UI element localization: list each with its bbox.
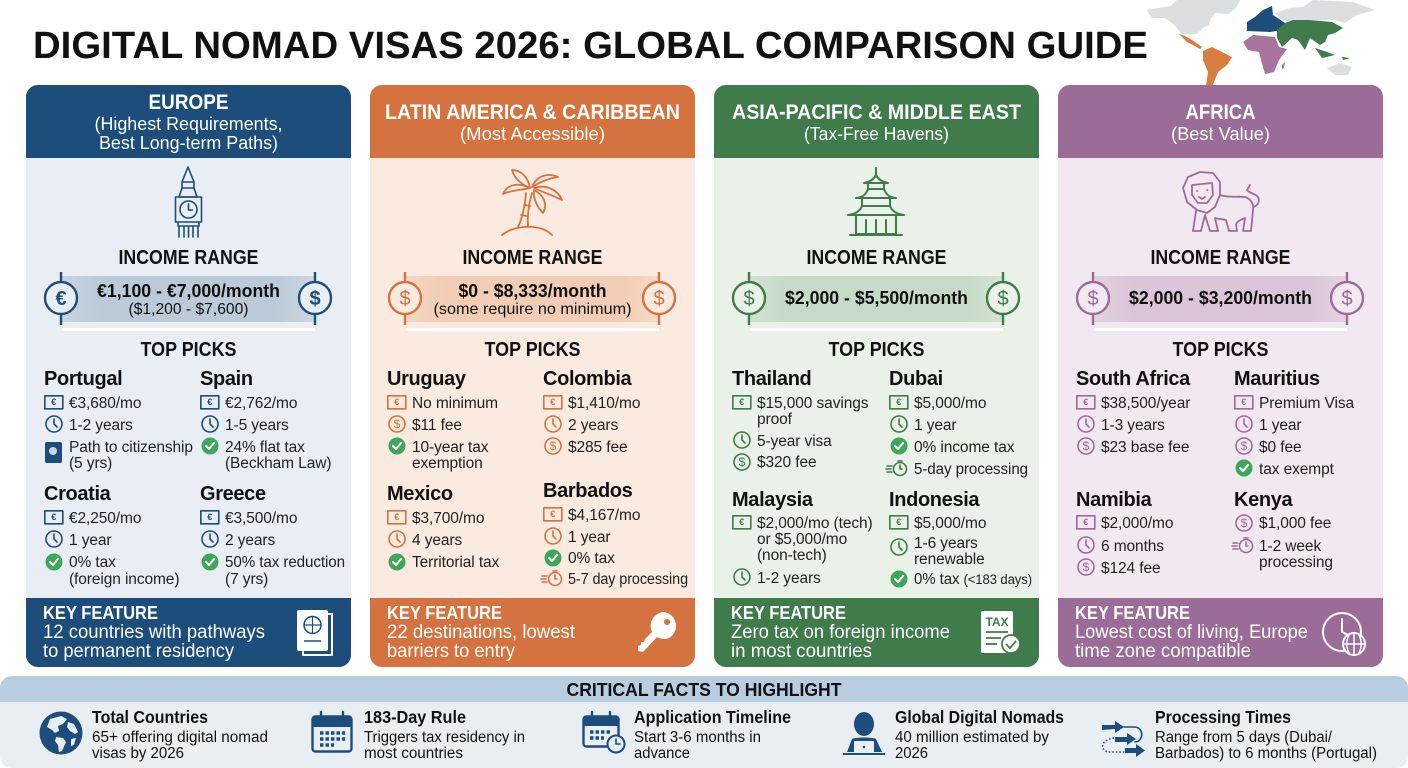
country: Barbados: 0% tax — [568, 550, 615, 567]
country: Indonesia: 0% tax (<183 days) — [914, 571, 1032, 588]
fact: 183-day rule: Triggers tax residency in — [364, 729, 525, 746]
country: Colombia: Colombia — [543, 368, 633, 390]
country: Malaysia: Malaysia — [732, 489, 814, 511]
heading: Europe: EUROPE — [148, 91, 228, 114]
country: Indonesia: € — [896, 517, 901, 527]
key feature: Europe: to permanent residency — [43, 641, 234, 662]
heading: Asia-Pacific — [732, 101, 1021, 144]
fact: processing times: Range from 5 days (Dubai/ — [1155, 729, 1333, 746]
fact: processing times: Processing Times — [1155, 707, 1291, 727]
income range band: (some require no minimum) — [434, 301, 632, 318]
fact: processing times: Barbados) to 6 months (Portugal) — [1155, 745, 1377, 762]
world map — [1147, 0, 1375, 87]
country: Croatia: Croatia — [44, 483, 112, 505]
country: Uruguay: No minimum — [412, 395, 498, 412]
key feature: Africa — [1058, 598, 1383, 667]
icon: dollar coin left: $ — [743, 288, 755, 310]
country: Portugal: (5 yrs) — [69, 455, 112, 472]
country: Dubai: 0% income tax — [914, 439, 1015, 456]
country: Spain: Spain — [200, 368, 253, 390]
heading: Europe: (Highest Requirements, — [94, 114, 282, 134]
country: Barbados — [541, 480, 688, 588]
country: Spain: (Beckham Law) — [225, 455, 331, 472]
country: Colombia: $1,410/mo — [568, 395, 640, 412]
top picks heading: TOP PICKS — [484, 339, 580, 361]
country: Namibia: $2,000/mo — [1101, 515, 1173, 532]
fact: global digital nomads: Global Digital Nomads — [895, 707, 1064, 727]
key feature: Europe: KEY FEATURE — [43, 603, 158, 623]
country: Thailand: $15,000 savings — [757, 395, 869, 412]
icon: dollar coin: $ — [309, 288, 321, 310]
fact: 183-day rule: most countries — [364, 745, 463, 762]
country: South Africa — [1076, 368, 1191, 456]
fact: total countries: 65+ offering digital nomad — [92, 729, 268, 746]
country: Colombia: € — [550, 397, 555, 407]
income range band: €1,100 - €7,000/month — [97, 281, 280, 301]
key feature: Asia-Pacific: Zero tax on foreign income — [731, 622, 950, 643]
icon: dollar coin left: $ — [1087, 288, 1099, 310]
top picks heading: TOP PICKS — [1172, 339, 1268, 361]
icon: euro coin — [45, 272, 77, 325]
country: Malaysia: or $5,000/mo — [757, 531, 847, 548]
country: Greece — [200, 483, 345, 588]
key feature: Asia-Pacific: KEY FEATURE — [731, 603, 846, 623]
country: Barbados: 5-7 day processing — [568, 571, 688, 588]
income range heading: INCOME RANGE — [462, 247, 602, 269]
income range band: $0 - $8,333/month — [458, 281, 606, 301]
country: Dubai: 5-day processing — [914, 461, 1028, 478]
country: Indonesia: Indonesia — [889, 489, 980, 511]
country: Mexico: $3,700/mo — [412, 510, 484, 527]
key feature: Latin America: barriers to entry — [387, 641, 515, 662]
country: Dubai: Dubai — [889, 368, 943, 390]
country: Namibia: 6 months — [1101, 538, 1164, 555]
country: Namibia: Namibia — [1076, 489, 1153, 511]
panel: Latin America and Caribbean — [370, 85, 695, 667]
country: Spain: €2,762/mo — [225, 395, 297, 412]
country: Croatia: 1 year — [69, 532, 111, 549]
country: Croatia: €2,250/mo — [69, 510, 141, 527]
key feature: Europe: 12 countries with pathways — [43, 622, 265, 643]
country: Croatia: 0% tax — [69, 554, 116, 571]
country: South Africa: $38,500/year — [1101, 395, 1190, 412]
top picks heading: TOP PICKS — [828, 339, 924, 361]
icon: dollar coin right — [643, 272, 675, 325]
country: Kenya: $1,000 fee — [1259, 515, 1331, 532]
country: Croatia: (foreign income) — [69, 571, 179, 588]
country: Uruguay — [387, 368, 498, 472]
key feature: Asia-Pacific: in most countries — [731, 641, 872, 662]
country: Portugal: Portugal — [44, 368, 122, 390]
country: Uruguay: € — [394, 397, 399, 407]
country: Kenya: processing — [1259, 554, 1333, 571]
heading: Africa: AFRICA — [1186, 101, 1256, 124]
fact: total countries: Total Countries — [92, 707, 208, 727]
heading: Africa: (Best Value) — [1171, 124, 1270, 144]
country: Mauritius: 1 year — [1259, 417, 1301, 434]
key feature: Africa: Lowest cost of living, Europe — [1075, 622, 1308, 643]
country: Kenya: $ — [1241, 516, 1248, 530]
country: Dubai — [886, 368, 1028, 478]
country: Malaysia: $2,000/mo (tech) — [757, 515, 873, 532]
country: Mexico: € — [394, 512, 399, 522]
country: Malaysia: € — [739, 517, 744, 527]
country: Mauritius: $0 fee — [1259, 439, 1302, 456]
country: Barbados: $4,167/mo — [568, 507, 640, 524]
country: South Africa: South Africa — [1076, 368, 1191, 390]
key feature: Latin America: 22 destinations, lowest — [387, 622, 576, 643]
icon: euro coin: € — [55, 288, 67, 310]
country: Indonesia: 1-6 years — [914, 535, 978, 552]
panel: Asia-Pacific and Middle East — [714, 85, 1039, 667]
country: Thailand: proof — [757, 411, 793, 428]
fact: total countries: visas by 2026 — [92, 745, 184, 762]
icon: dollar coin left — [733, 272, 765, 325]
heading: Latin America — [385, 101, 680, 144]
country: Thailand — [732, 368, 869, 471]
income range band — [750, 276, 1003, 331]
country: Barbados: € — [550, 509, 555, 519]
country: Kenya — [1232, 489, 1333, 571]
country: Barbados: 1 year — [568, 529, 610, 546]
country: Mauritius: Premium Visa — [1259, 395, 1354, 412]
panel: critical facts — [0, 676, 1408, 768]
fact: global digital nomads — [843, 707, 1064, 762]
heading: Latin America: LATIN AMERICA & CARIBBEAN — [385, 101, 680, 124]
country: Mauritius: € — [1241, 397, 1246, 407]
icon: dollar coin right: $ — [1341, 288, 1353, 310]
country: Indonesia: $5,000/mo — [914, 515, 986, 532]
title: DIGITAL NOMAD VISAS 2026: GLOBAL COMPARISON GUIDE — [33, 25, 1148, 67]
fact: application timeline: Start 3-6 months in — [634, 729, 761, 746]
icon: pagoda — [848, 168, 904, 235]
country: Colombia: $ — [550, 439, 557, 453]
country: Spain: 24% flat tax — [225, 439, 305, 456]
fact: application timeline: Application Timeline — [634, 707, 791, 727]
country: Dubai: 1 year — [914, 417, 956, 434]
country: Greece: Greece — [200, 483, 266, 505]
country: Mexico: 4 years — [412, 532, 462, 549]
icon: dollar coin right — [1331, 272, 1363, 325]
panel: Europe — [26, 85, 351, 667]
top picks heading: TOP PICKS — [140, 339, 236, 361]
country: Greece: €3,500/mo — [225, 510, 297, 527]
country: Indonesia: renewable — [914, 551, 985, 568]
country: Colombia — [543, 368, 640, 456]
country: Mauritius — [1234, 368, 1354, 478]
fact: application timeline: advance — [634, 745, 690, 762]
country: Portugal — [44, 368, 193, 472]
country: Croatia: € — [51, 512, 56, 522]
country: Indonesia — [889, 489, 1032, 588]
country: Spain: 1-5 years — [225, 417, 289, 434]
fact: total countries — [40, 707, 268, 762]
country: Mexico — [387, 483, 500, 571]
country: Portugal: €3,680/mo — [69, 395, 141, 412]
icon: clock tower — [176, 167, 202, 237]
country: Thailand: Thailand — [732, 368, 811, 390]
income range band: $2,000 - $5,500/month — [785, 288, 968, 308]
fact: 183-day rule: 183-Day Rule — [364, 707, 466, 727]
country: Mauritius: Mauritius — [1234, 368, 1320, 390]
icon: dollar coin right: $ — [997, 288, 1009, 310]
country: Mexico: Territorial tax — [412, 554, 500, 571]
country: Greece: (7 yrs) — [225, 571, 268, 588]
country: Kenya: Kenya — [1234, 489, 1294, 511]
country: South Africa: $23 base fee — [1101, 439, 1189, 456]
country: Uruguay: Uruguay — [387, 368, 467, 390]
key feature: Latin America: KEY FEATURE — [387, 603, 502, 623]
heading: critical facts: CRITICAL FACTS TO HIGHLIGHT — [566, 680, 842, 700]
country: Spain — [200, 368, 331, 472]
country: Namibia: $ — [1083, 560, 1090, 574]
income range heading: INCOME RANGE — [806, 247, 946, 269]
heading: Europe — [94, 91, 282, 153]
key feature: Asia-Pacific — [714, 598, 1039, 667]
income range band — [406, 276, 659, 331]
country: Barbados: Barbados — [543, 480, 633, 502]
country: Greece: € — [207, 512, 212, 522]
country: Thailand: € — [739, 397, 744, 407]
country: Namibia: € — [1083, 517, 1088, 527]
country: Uruguay: $11 fee — [412, 417, 462, 434]
country: Malaysia — [732, 489, 873, 587]
country: Greece: 50% tax reduction — [225, 554, 345, 571]
country: Malaysia: (non-tech) — [757, 547, 827, 564]
key feature: Asia-Pacific: TAX — [985, 615, 1009, 629]
country: Dubai: $5,000/mo — [914, 395, 986, 412]
country: South Africa: 1-3 years — [1101, 417, 1165, 434]
heading: Latin America: (Most Accessible) — [460, 124, 605, 144]
country: Namibia: $124 fee — [1101, 560, 1161, 577]
income range band: ($1,200 - $7,600) — [128, 301, 248, 318]
icon: dollar coin left: $ — [399, 288, 411, 310]
fact: 183-day rule — [312, 707, 525, 762]
key feature: Africa: KEY FEATURE — [1075, 603, 1190, 623]
country: Namibia — [1076, 489, 1173, 577]
icon: dollar coin left — [389, 272, 421, 325]
key feature: Africa: time zone compatible — [1075, 641, 1251, 662]
country: Croatia — [44, 483, 179, 588]
icon: dollar coin right — [987, 272, 1019, 325]
fact: processing times — [1102, 707, 1377, 762]
country: Thailand: 5-year visa — [757, 433, 832, 450]
fact: application timeline — [583, 707, 791, 762]
icon: palm tree — [502, 170, 562, 235]
country: Malaysia: 1-2 years — [757, 570, 821, 587]
heading: Europe: Best Long-term Paths) — [99, 133, 278, 153]
country: Mauritius: tax exempt — [1259, 461, 1335, 478]
country: Portugal: 1-2 years — [69, 417, 133, 434]
country: Uruguay: 10-year tax — [412, 439, 489, 456]
country: Portugal: € — [51, 397, 56, 407]
panel: Africa — [1058, 85, 1383, 667]
fact: global digital nomads: 2026 — [895, 745, 928, 762]
country: Portugal: Path to citizenship — [69, 439, 193, 456]
key feature: Latin America — [370, 598, 695, 667]
country: Mexico: Mexico — [387, 483, 453, 505]
icon: dollar coin left — [1077, 272, 1109, 325]
income range heading: INCOME RANGE — [118, 247, 258, 269]
country: Dubai: € — [896, 397, 901, 407]
country: Uruguay: exemption — [412, 455, 483, 472]
country: Kenya: 1-2 week — [1259, 538, 1321, 555]
income range band: $2,000 - $3,200/month — [1129, 288, 1312, 308]
income range heading: INCOME RANGE — [1150, 247, 1290, 269]
icon: dollar coin right: $ — [653, 288, 665, 310]
country: Uruguay: $ — [394, 417, 401, 431]
icon: lion — [1183, 172, 1259, 231]
country: South Africa: $ — [1083, 439, 1090, 453]
heading: Asia-Pacific: (Tax-Free Havens) — [804, 124, 949, 144]
country: Colombia: $285 fee — [568, 439, 628, 456]
country: Thailand: $ — [739, 455, 746, 469]
income range band — [1094, 276, 1347, 331]
key feature: Europe — [26, 598, 351, 667]
heading: Africa — [1171, 101, 1270, 144]
country: Greece: 2 years — [225, 532, 275, 549]
country: Thailand: $320 fee — [757, 454, 817, 471]
fact: global digital nomads: 40 million estimated by — [895, 729, 1049, 746]
country: Mauritius: $ — [1241, 439, 1248, 453]
heading: Asia-Pacific: ASIA-PACIFIC & MIDDLE EAST — [732, 101, 1021, 124]
icon: dollar coin — [299, 272, 331, 325]
country: Colombia: 2 years — [568, 417, 618, 434]
country: South Africa: € — [1083, 397, 1088, 407]
country: Spain: € — [207, 397, 212, 407]
income range band — [62, 276, 315, 331]
